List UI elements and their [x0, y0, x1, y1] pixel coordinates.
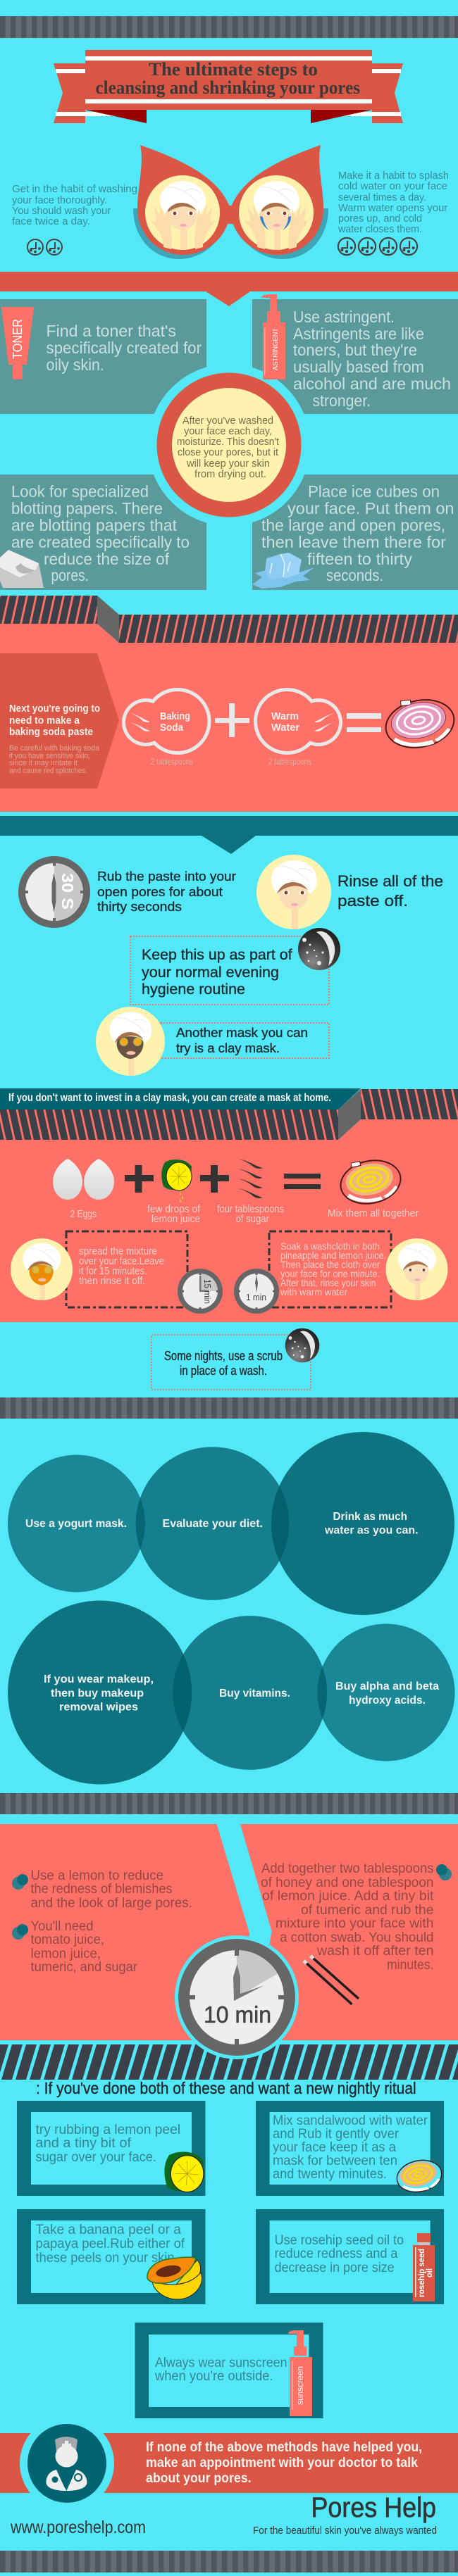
text: lemon steps: tomato juice, [31, 1933, 104, 1947]
panel: blotting papers: Look for specialized [11, 482, 149, 501]
icon: 1 minute timer: 1 min [246, 1292, 266, 1302]
icon: warm water cloud: Water [271, 722, 299, 734]
card: lemon peel [17, 2101, 206, 2196]
card: sunscreen [135, 2323, 323, 2418]
brand [253, 2492, 437, 2537]
icon: clay mask face [96, 1007, 165, 1076]
text: honey steps: a cotton swab. You should [280, 1930, 434, 1945]
moisturize circle: After you've washed [182, 415, 273, 427]
brand: Pores Help [311, 2492, 436, 2523]
circle: evaluate diet: Evaluate your diet. [162, 1518, 263, 1530]
icon: four times a day clocks [338, 238, 417, 255]
step: soak a washcloth: Soak a washcloth in both [280, 1240, 380, 1252]
callout: scrub: Some nights, use a scrub [164, 1349, 283, 1363]
dark band with pointer [0, 816, 458, 854]
callout: clay mask [161, 1023, 329, 1058]
icon: papaya and banana [147, 2257, 202, 2299]
drops with faces [133, 145, 328, 259]
baking soda amount: 2 tablespoons [151, 757, 193, 767]
card: sandalwood: Mix sandalwood with water [273, 2113, 428, 2128]
title text: cleansing and shrinking your pores [96, 77, 360, 98]
icon: baking soda cloud: Baking [160, 710, 190, 722]
panel: ice cubes: seconds. [326, 566, 383, 584]
callout: baking soda paste: Next you're going to [9, 703, 100, 715]
panel: blotting papers: reduce the size of [44, 550, 170, 568]
icon: baking soda cloud: Soda [160, 722, 184, 734]
icon: plain face [386, 1238, 447, 1300]
bottom stripe band [0, 2551, 458, 2572]
equals sign [284, 1174, 321, 1189]
stripe band [0, 1793, 458, 1814]
step: spread the mixture [66, 1231, 187, 1307]
left wash text [12, 183, 137, 227]
card: banana or papaya peel: papaya peel.Rub either of [35, 2237, 185, 2251]
step: soak a washcloth: your face for one minute. [280, 1268, 380, 1279]
icon: toner tube: TONER [11, 319, 25, 359]
circle: yogurt mask [8, 1455, 145, 1592]
panel: astringent: stronger. [313, 391, 371, 410]
icon: blotting paper stack [0, 550, 44, 588]
step: soak a washcloth: pineapple and lemon juice. [280, 1250, 386, 1261]
left wash text: Get in the habit of washing [12, 183, 137, 195]
icon: sunscreen bottle: sunscreen [295, 2366, 305, 2405]
step: rub the paste: thirty seconds [97, 899, 182, 914]
moisturize circle [148, 364, 310, 526]
circle: vitamins [173, 1616, 327, 1770]
ingredient labels: Mix them all together [328, 1207, 419, 1219]
circle: vitamins: Buy vitamins. [219, 1688, 290, 1699]
panel: astringent: toners, but they're [293, 341, 417, 359]
card: banana or papaya peel: these peels on your skin [35, 2251, 175, 2266]
right splash text: cold water on your face [338, 180, 447, 192]
card: sandalwood [256, 2101, 445, 2196]
ingredient labels: of sugar [235, 1213, 269, 1225]
circle: yogurt mask: Use a yogurt mask. [25, 1518, 127, 1530]
callout: baking soda paste: need to make a [9, 715, 80, 727]
text: lemon steps: the redness of blemishes [31, 1882, 172, 1897]
left wash text: You should wash your [12, 205, 111, 217]
text: honey steps [261, 1861, 434, 1973]
red band with pointer [0, 272, 458, 306]
panel: ice cubes: fifteen to thirty [307, 550, 413, 568]
left wash text: face twice a day. [12, 215, 90, 227]
coral section: baking soda paste [0, 596, 458, 812]
text: lemon steps: Use a lemon to reduce [31, 1868, 163, 1883]
moisturize circle: close your pores, but it [178, 446, 279, 458]
moisturize circle: from drying out. [194, 468, 266, 480]
stripes [0, 596, 97, 624]
icon: four spoons [238, 1159, 263, 1198]
ingredient labels: four tablespoons [217, 1203, 284, 1215]
face: left portrait [145, 175, 220, 250]
warm water amount: 2 tablespoons [268, 757, 311, 767]
card: sandalwood: and Rub it gently over [273, 2127, 400, 2142]
coral section: lemon and honey [0, 1824, 458, 2080]
left wash text: your face thoroughly. [12, 194, 107, 206]
callout: baking soda paste: Be careful with baking soda [9, 744, 100, 753]
website url: www.poreshelp.com [10, 2518, 146, 2537]
icon: rosehip bottle: oil [426, 2268, 434, 2277]
card: rosehip seed oil: Use rosehip seed oil to [275, 2233, 404, 2248]
ingredient labels: lemon juice [151, 1213, 200, 1225]
step: rinse: paste off. [338, 892, 408, 910]
moisturize circle: your face each day, [184, 425, 272, 437]
text: see a doctor [146, 2440, 422, 2486]
circles: six extra tips [8, 1432, 455, 1784]
icon: night moon [298, 928, 340, 970]
band: see a doctor [0, 2416, 458, 2511]
plus sign [200, 1165, 229, 1193]
icon: 1 minute timer [234, 1269, 279, 1314]
card: lemon peel: sugar over your face. [35, 2150, 156, 2165]
title ribbon [54, 50, 403, 123]
card: banana or papaya peel [17, 2209, 206, 2304]
text: honey steps: minutes. [387, 1958, 434, 1973]
right splash text: Warm water opens your [338, 202, 447, 214]
step: rinse [338, 872, 443, 910]
panel: blotting papers: are blotting papers that [11, 516, 178, 534]
right splash text: several times a day. [338, 191, 426, 203]
text: lemon steps [31, 1868, 192, 1975]
panel: ice cubes: your face. Put them on [287, 499, 454, 517]
text: honey steps: mixture into your face with [276, 1916, 434, 1931]
icon: orange mask face [11, 1238, 73, 1300]
card: rosehip seed oil: reduce redness and a [275, 2247, 398, 2261]
step: soak a washcloth: After that, rinse your skin [280, 1277, 376, 1288]
icon: 10 minute timer: 10 min [204, 2002, 271, 2028]
circle: makeup wipes: then buy makeup [51, 1688, 144, 1699]
moisturize circle: will keep your skin [186, 458, 270, 470]
panel: toner: specifically created for [47, 339, 202, 357]
card: lemon peel: and a tiny bit of [35, 2136, 132, 2151]
step: spread the mixture: then rinse it off. [79, 1275, 145, 1287]
text: lemon steps: lemon juice, [31, 1947, 101, 1961]
stripes [361, 1089, 458, 1119]
text: honey steps: of tumeric and rub the [301, 1903, 434, 1918]
text: honey steps: wash it off after ten [316, 1944, 434, 1959]
top stripe band [0, 16, 458, 38]
callout: baking soda paste: since it may irritate it [9, 759, 78, 767]
right splash text: water closes them. [338, 223, 422, 235]
panel: astringent: alcohol and are much [293, 375, 451, 393]
circle: makeup wipes: If you wear makeup, [44, 1673, 154, 1685]
coral section: homemade mask [0, 1088, 458, 1322]
step: spread the mixture: it for 15 minutes. [79, 1265, 147, 1277]
stripe band [0, 1397, 458, 1419]
panel: blotting papers [0, 475, 206, 590]
icon: baking soda cloud [122, 688, 211, 755]
circle: hydroxy acids [317, 1623, 455, 1761]
step: rub the paste: open pores for about [97, 884, 223, 899]
icon: 30 second timer: 30 S [58, 873, 77, 910]
circle: drink water: water as you can. [324, 1525, 419, 1536]
icon: doctor [47, 2437, 87, 2491]
icon: 15 minute timer: 15 min [202, 1279, 212, 1304]
icon: yellow compact [336, 1154, 404, 1209]
icon: face rinse [256, 855, 331, 929]
card: sandalwood: your face keep it as a [273, 2140, 396, 2155]
panel: toner: Find a toner that's [47, 322, 176, 340]
icon: warm water cloud [254, 688, 342, 755]
banner: homemade mask [0, 1088, 361, 1110]
card: sunscreen: when you're outside. [154, 2369, 273, 2384]
circle: drink water [271, 1432, 454, 1615]
moisturize circle: moisturize. This doesn't [177, 436, 280, 448]
icon: twice a day clocks [27, 239, 62, 255]
callout: baking soda paste: if you have sensitive skin, [9, 752, 90, 760]
text: lemon steps: and the look of large pores. [31, 1896, 192, 1911]
callout: baking soda paste: and cause red splotches. [9, 767, 87, 775]
step: soak a washcloth: Then place the cloth over [280, 1259, 380, 1270]
text: honey steps: Add together two tablespoons [261, 1861, 434, 1876]
ingredient labels: 2 Eggs [70, 1208, 97, 1220]
panel: astringent: Astringents are like [293, 325, 424, 343]
panel: astringent: Use astringent. [293, 308, 395, 326]
panel: blotting papers: are created specifically to [11, 533, 190, 551]
panel: ice cubes: then leave them there for [261, 533, 446, 551]
icon: ice cubes [252, 553, 314, 589]
icon: toner tube [1, 307, 34, 379]
ingredient labels [70, 1203, 419, 1225]
text: lemon steps: tumeric, and sugar [31, 1960, 138, 1975]
circle: hydroxy acids: Buy alpha and beta [335, 1680, 439, 1692]
card: lemon peel: try rubbing a lemon peel [35, 2123, 180, 2137]
circle: makeup wipes: removal wipes [59, 1701, 138, 1714]
circle: hydroxy acids: hydroxy acids. [349, 1695, 426, 1707]
callout: evening routine: Keep this up as part of [142, 947, 292, 963]
circle: evaluate diet [136, 1447, 289, 1600]
callout: baking soda paste: baking soda paste [9, 726, 93, 738]
icon: 10 minute timer [175, 1935, 299, 2059]
text: see a doctor: make an appointment with your doctor to talk [146, 2456, 418, 2470]
step: rinse: Rinse all of the [338, 872, 443, 890]
right splash text [338, 170, 449, 235]
ingredient labels: few drops of [147, 1203, 201, 1215]
icon: moon [285, 1328, 319, 1362]
face: right portrait with water [239, 175, 314, 250]
icon: 15 minute timer [178, 1269, 223, 1314]
icon: sandalwood compact [394, 2156, 445, 2196]
panel: ice cubes [252, 475, 458, 590]
callout: scrub [151, 1335, 311, 1390]
stripes [0, 2044, 458, 2080]
step: rub the paste [97, 869, 236, 914]
icon: astringent bottle [261, 294, 285, 379]
icon: lemon [164, 2151, 204, 2192]
icon: eggs [53, 1159, 114, 1200]
icon: rosehip bottle [413, 2233, 435, 2301]
text: honey steps: of honey and one tablespoon [261, 1876, 434, 1890]
bullets: lemon [12, 1874, 28, 1940]
step: spread the mixture: over your face.Leave [79, 1255, 164, 1267]
icon: 30 second timer [18, 856, 90, 928]
step: soak a washcloth [269, 1231, 391, 1307]
panel: blotting papers: blotting papers. There [11, 499, 163, 517]
icon: astringent bottle: ASTRINGENT [271, 327, 280, 370]
icon: pink compact [380, 691, 458, 753]
icon: cotton swabs [304, 1956, 359, 2004]
text: see a doctor: about your pores. [146, 2471, 251, 2486]
panel: astringent [252, 299, 458, 414]
step: rub the paste: Rub the paste into your [97, 869, 236, 884]
brand: For the beautiful skin you've always wanted [253, 2525, 437, 2537]
title text [96, 59, 360, 98]
card: rosehip seed oil [256, 2209, 444, 2304]
panel: ice cubes: Place ice cubes on [308, 482, 440, 501]
icon: warm water cloud: Warm [271, 710, 299, 722]
equals sign [347, 713, 381, 732]
card: sunscreen: Always wear sunscreen [155, 2356, 287, 2370]
plus sign [125, 1165, 154, 1193]
step: soak a washcloth: with warm water [280, 1286, 347, 1298]
callout: evening routine [130, 936, 329, 1005]
callout: clay mask: try is a clay mask. [176, 1041, 280, 1055]
card: sandalwood: and twenty minutes. [273, 2167, 387, 2182]
panel: blotting papers: pores. [51, 566, 89, 584]
icon: lemon with drops [161, 1160, 192, 1202]
icon: rosehip bottle: rosehip seed [418, 2249, 426, 2297]
step: spread the mixture: spread the mixture [79, 1245, 157, 1257]
callout: clay mask: Another mask you can [176, 1025, 308, 1040]
panel: toner: oily skin. [47, 356, 104, 374]
bullets: honey [436, 1864, 452, 1880]
card: banana or papaya peel: Take a banana peel or a [35, 2223, 181, 2237]
right splash text: pores up, and cold [338, 213, 422, 225]
panel: toner [0, 299, 206, 414]
banner: homemade mask: If you don't want to invest in a clay mask, you can create a mask at home. [8, 1092, 331, 1104]
callout: evening routine: your normal evening [142, 965, 279, 981]
circle: makeup wipes [8, 1601, 192, 1784]
panel: ice cubes: the large and open pores, [261, 516, 445, 534]
text: lemon steps: You'll need [31, 1919, 93, 1934]
text: honey steps: of lemon juice. Add a tiny bit [262, 1889, 434, 1904]
icon: sunscreen bottle [288, 2330, 312, 2416]
card: rosehip seed oil: decrease in pore size [275, 2261, 395, 2275]
plus sign [215, 703, 249, 737]
card: sandalwood: mask for between ten [273, 2154, 397, 2168]
heading: nightly ritual: : If you've done both of these and want a new nightly ritual [36, 2079, 416, 2097]
panel: astringent: usually based from [293, 358, 424, 376]
callout: scrub: in place of a wash. [180, 1364, 267, 1378]
callout: evening routine: hygiene routine [142, 981, 245, 998]
right splash text: Make it a habit to splash [338, 170, 449, 182]
title text: The ultimate steps to [149, 59, 318, 80]
circle: drink water: Drink as much [333, 1511, 407, 1523]
callout: baking soda paste [0, 653, 119, 788]
text: see a doctor: If none of the above methods have helped you, [146, 2440, 422, 2455]
